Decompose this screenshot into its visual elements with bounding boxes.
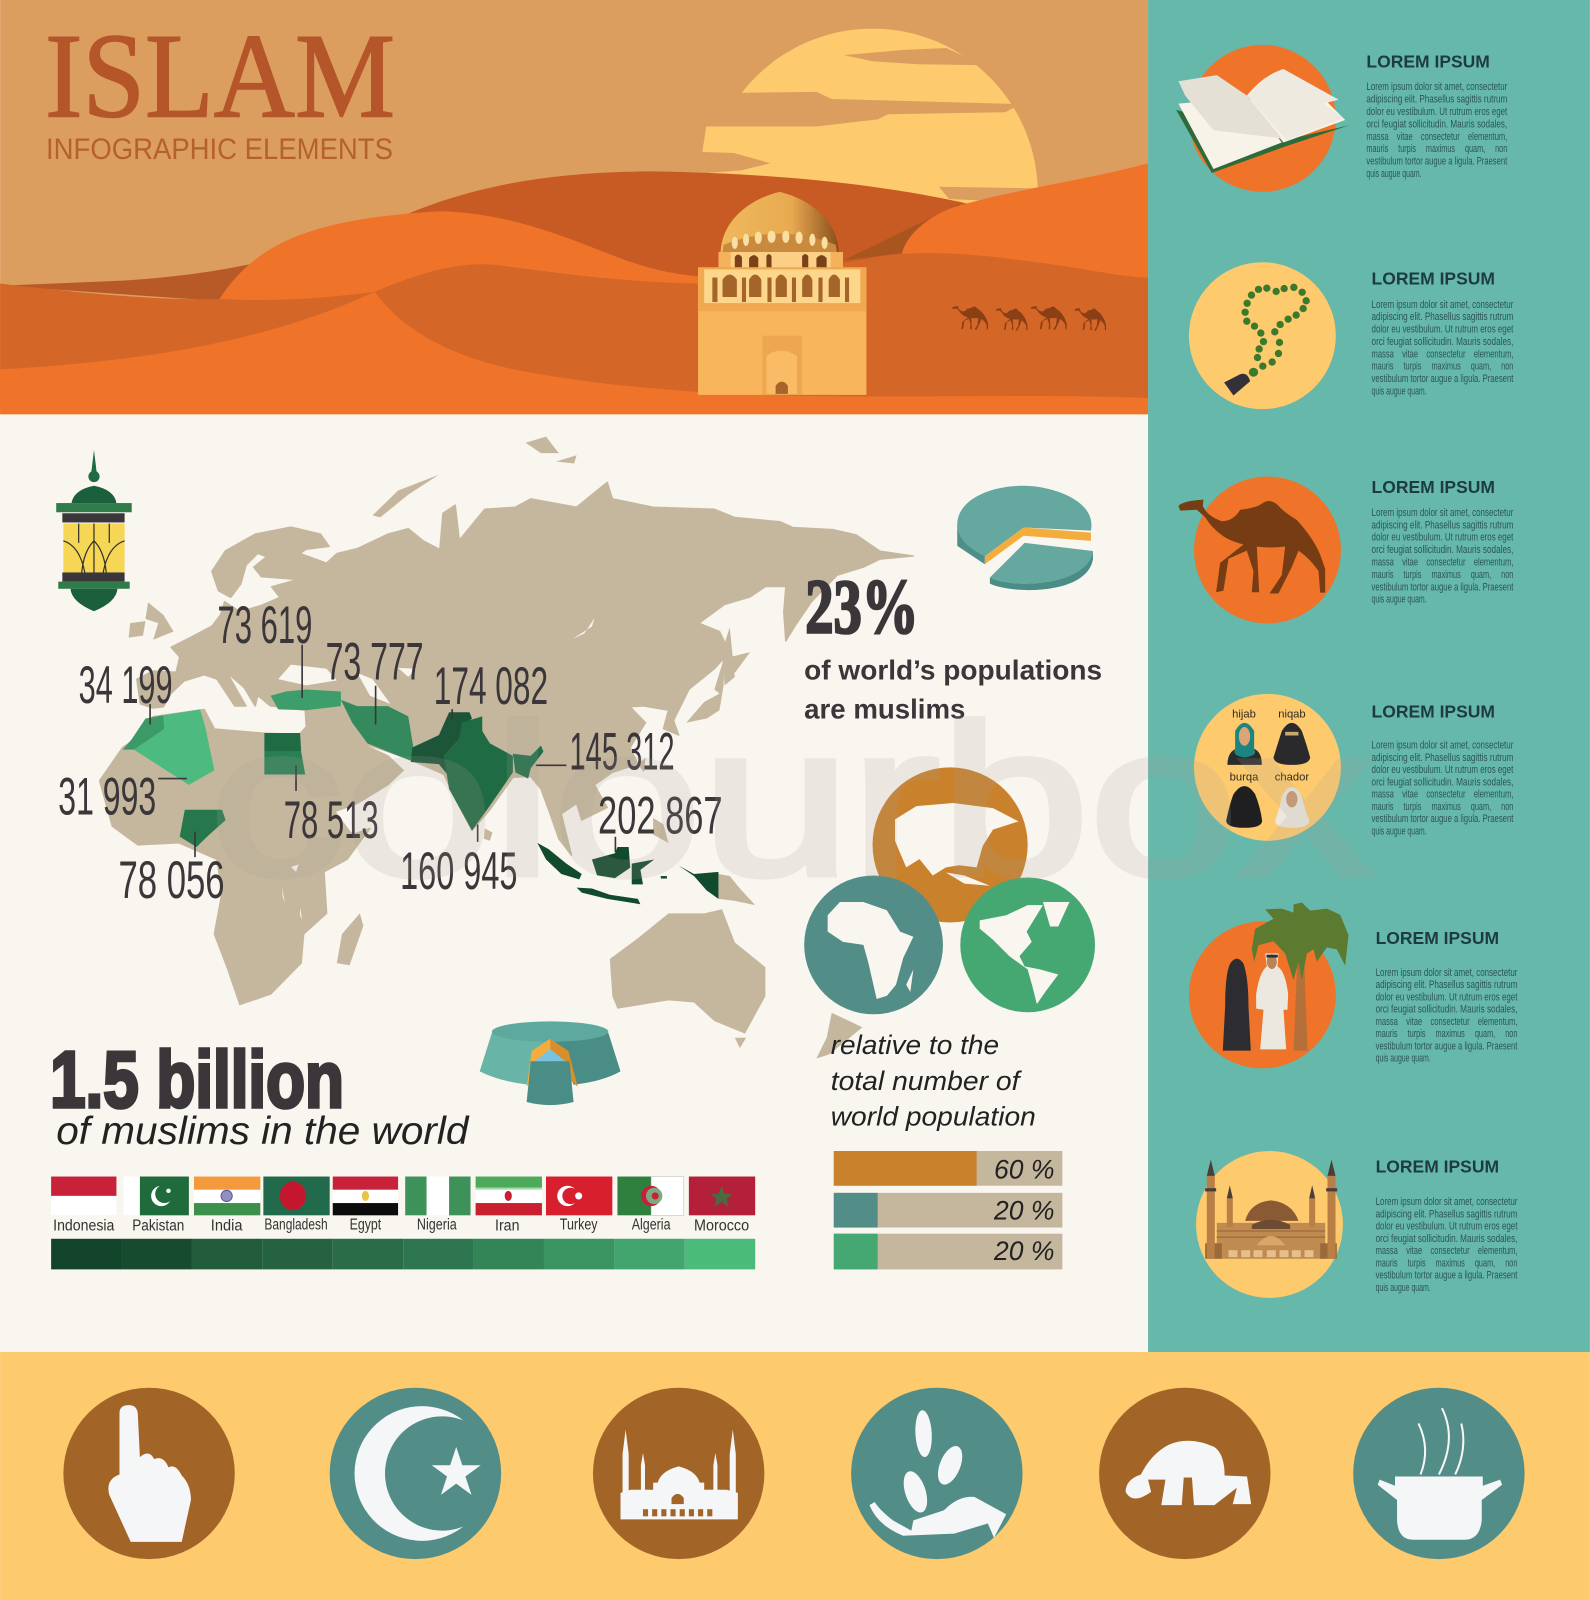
panel: bottom band	[0, 1352, 1590, 1600]
body text: mauris turpis maximus quam, non	[1372, 569, 1513, 581]
heading: LOREM IPSUM	[1372, 269, 1495, 289]
pie chart	[957, 486, 1093, 590]
icon: coins in hand	[851, 1388, 1023, 1559]
flag: Turkey	[546, 1177, 612, 1215]
subtitle: INFOGRAPHIC ELEMENTS	[46, 133, 393, 166]
icon: crescent and star	[330, 1388, 501, 1559]
body text: massa vitae consectetur elementum,	[1376, 1245, 1517, 1257]
icon: cooking pot with steam	[1353, 1388, 1525, 1559]
body text: mauris turpis maximus quam, non	[1376, 1257, 1517, 1269]
icon: four veil types	[1226, 723, 1310, 828]
country labels: Turkey	[560, 1217, 598, 1234]
country labels: Iran	[495, 1218, 519, 1235]
bar chart: continents: 20 %	[993, 1195, 1054, 1225]
flag: Egypt	[333, 1177, 398, 1215]
icon: lantern	[56, 450, 132, 611]
heading: LOREM IPSUM	[1372, 701, 1495, 721]
sun with clouds	[674, 29, 1061, 359]
text: relative to population	[831, 1030, 1036, 1132]
lakes	[278, 618, 594, 920]
body text	[1376, 1196, 1518, 1294]
map numbers and leader lines: 31 993	[58, 767, 156, 826]
icon: prostrating figure	[1099, 1388, 1271, 1559]
body text: quis augue quam.	[1372, 594, 1427, 606]
icon: open book	[1176, 69, 1349, 173]
icon: mosque silhouette	[593, 1388, 764, 1559]
bar chart: continents	[834, 1151, 1062, 1269]
icon: camel	[1178, 500, 1325, 593]
flag: Bangladesh	[263, 1177, 330, 1215]
map numbers and leader lines: 160 945	[400, 842, 517, 901]
icon: tasbih beads	[1224, 284, 1310, 396]
body text: adipiscing elit. Phasellus sagittis rutrum	[1366, 94, 1507, 106]
body text: dolor eu vestibulum. Ut rutrum eros eget	[1376, 1221, 1518, 1233]
text: relative to population: relative to the	[831, 1030, 999, 1060]
body text: orci feugiat sollicitudin. Mauris sodales,	[1376, 1233, 1517, 1245]
heading: LOREM IPSUM	[1376, 928, 1499, 948]
body text: adipiscing elit. Phasellus sagittis rutrum	[1376, 1208, 1517, 1220]
body text: mauris turpis maximus quam, non	[1366, 143, 1507, 155]
label: veil names: niqab	[1278, 708, 1306, 720]
islands	[129, 437, 862, 1058]
text: relative to population: total number of	[831, 1066, 1022, 1096]
watermark: colourbox	[209, 681, 1373, 920]
landmass: Eurasia	[137, 482, 913, 855]
body text: Lorem ipsum dolor sit amet, consectetur	[1376, 967, 1518, 979]
body text: adipiscing elit. Phasellus sagittis rutrum	[1376, 979, 1517, 991]
text: population statement: of world’s populations	[804, 655, 1102, 686]
body text: quis augue quam.	[1372, 385, 1427, 397]
heading: LOREM IPSUM	[1376, 1156, 1499, 1176]
body text: quis augue quam.	[1376, 1282, 1431, 1294]
world map	[100, 437, 913, 1058]
country labels: Morocco	[694, 1218, 749, 1235]
body text	[1372, 740, 1514, 837]
bar chart: continents: 60 %	[994, 1155, 1054, 1185]
map numbers and leader lines: 174 082	[434, 657, 548, 716]
body text: dolor eu vestibulum. Ut rutrum eros eget	[1372, 764, 1514, 776]
body text: orci feugiat sollicitudin. Mauris sodales,	[1372, 544, 1513, 556]
body text: massa vitae consectetur elementum,	[1372, 789, 1513, 801]
body text: mauris turpis maximus quam, non	[1376, 1028, 1517, 1040]
sidebar item 1: book	[1176, 45, 1508, 192]
sidebar item 3: camel	[1178, 477, 1514, 623]
body text: dolor eu vestibulum. Ut rutrum eros eget	[1372, 324, 1514, 336]
continent circle: Africa	[804, 876, 943, 1014]
flags row	[51, 1177, 755, 1215]
flag: Iran	[476, 1177, 542, 1215]
body text: quis augue quam.	[1376, 1053, 1431, 1065]
label: veil names: hijab	[1232, 708, 1256, 720]
icon: grand mosque	[1205, 1160, 1337, 1259]
country labels: Egypt	[350, 1217, 382, 1234]
panel: teal sidebar	[1148, 0, 1590, 1352]
body text: adipiscing elit. Phasellus sagittis rutrum	[1372, 519, 1513, 531]
country labels: Pakistan	[132, 1218, 184, 1235]
sidebar item 6: grand mosque	[1196, 1151, 1518, 1298]
green scale bar	[51, 1239, 755, 1269]
flag: Algeria	[617, 1177, 684, 1215]
body text: orci feugiat sollicitudin. Mauris sodales,	[1372, 776, 1513, 788]
body text: vestibulum tortor augue a ligula. Praesent	[1372, 813, 1514, 825]
body text: vestibulum tortor augue a ligula. Praesent	[1372, 373, 1514, 385]
sidebar item 5: couple and palm	[1189, 902, 1518, 1068]
mosque tower	[698, 192, 866, 395]
country labels: Indonesia	[53, 1218, 115, 1235]
body text: mauris turpis maximus quam, non	[1372, 361, 1513, 373]
body text: massa vitae consectetur elementum,	[1376, 1016, 1517, 1028]
body text: adipiscing elit. Phasellus sagittis rutrum	[1372, 752, 1513, 764]
bar chart: continents: 20 %	[993, 1236, 1054, 1266]
country labels	[53, 1217, 749, 1235]
stat: 1.5 billion: 1.5 billion	[50, 1035, 344, 1124]
body text: adipiscing elit. Phasellus sagittis rutrum	[1372, 311, 1513, 323]
continent circle: Asia	[873, 767, 1028, 922]
map numbers and leader lines: 202 867	[598, 787, 723, 846]
body text: vestibulum tortor augue a ligula. Praesent	[1366, 156, 1508, 168]
text: population statement: are muslims	[804, 693, 965, 724]
map numbers and leader lines: 145 312	[569, 722, 675, 781]
label: veil names: chador	[1275, 772, 1309, 784]
country labels: India	[211, 1218, 243, 1235]
map numbers and leader lines	[58, 596, 723, 910]
stat: 23%: 23%	[805, 564, 918, 650]
sidebar item 2: prayer beads	[1189, 262, 1514, 409]
body text: dolor eu vestibulum. Ut rutrum eros eget	[1376, 991, 1518, 1003]
icon: shahada pointing finger	[63, 1388, 235, 1559]
country labels: Algeria	[632, 1217, 671, 1234]
map numbers and leader lines: 78 056	[118, 851, 225, 910]
map numbers and leader lines: 78 513	[284, 791, 379, 850]
body text: dolor eu vestibulum. Ut rutrum eros eget	[1366, 106, 1508, 118]
body text: Lorem ipsum dolor sit amet, consectetur	[1372, 299, 1514, 311]
body text: quis augue quam.	[1366, 168, 1422, 180]
country labels: Bangladesh	[264, 1217, 328, 1234]
body text	[1376, 967, 1518, 1065]
flag: Morocco	[689, 1177, 755, 1215]
map numbers and leader lines: 73 777	[326, 633, 424, 692]
flag: Indonesia	[51, 1177, 116, 1215]
icon: couple and palm	[1223, 902, 1349, 1051]
text: population statement	[804, 655, 1102, 724]
body text: massa vitae consectetur elementum,	[1372, 557, 1513, 569]
flag: Nigeria	[405, 1177, 471, 1215]
body text: massa vitae consectetur elementum,	[1366, 131, 1507, 143]
body text: orci feugiat sollicitudin. Mauris sodales,	[1366, 118, 1507, 130]
icon: hat shrine	[480, 1021, 621, 1105]
label: veil names	[1230, 708, 1309, 784]
body text: quis augue quam.	[1372, 825, 1427, 837]
body text: massa vitae consectetur elementum,	[1372, 348, 1513, 360]
camel caravan	[952, 306, 1106, 330]
body text: Lorem ipsum dolor sit amet, consectetur	[1372, 740, 1514, 752]
body text: orci feugiat sollicitudin. Mauris sodales,	[1376, 1004, 1517, 1016]
body text: Lorem ipsum dolor sit amet, consectetur	[1376, 1196, 1518, 1208]
flag: India	[194, 1177, 260, 1215]
continent circle: Americas	[960, 878, 1095, 1012]
highlighted countries	[123, 689, 718, 904]
body text: Lorem ipsum dolor sit amet, consectetur	[1372, 507, 1514, 519]
body text: orci feugiat sollicitudin. Mauris sodales,	[1372, 336, 1513, 348]
text: relative to population: world population	[831, 1102, 1036, 1132]
body text: mauris turpis maximus quam, non	[1372, 801, 1513, 813]
map numbers and leader lines: 73 619	[217, 596, 312, 655]
panel: desert header	[0, 0, 1148, 414]
sidebar item 4: veils	[1194, 694, 1514, 841]
landmass: Africa	[100, 709, 370, 1005]
dunes	[0, 163, 1148, 414]
body text: dolor eu vestibulum. Ut rutrum eros eget	[1372, 532, 1514, 544]
body text: vestibulum tortor augue a ligula. Praesent	[1376, 1040, 1518, 1052]
body text	[1372, 299, 1514, 397]
body text: Lorem ipsum dolor sit amet, consectetur	[1366, 81, 1507, 93]
body text: vestibulum tortor augue a ligula. Praesent	[1376, 1270, 1518, 1282]
body text: vestibulum tortor augue a ligula. Praesent	[1372, 581, 1514, 593]
body text	[1372, 507, 1514, 606]
heading: LOREM IPSUM	[1372, 477, 1495, 497]
flag: Pakistan	[124, 1177, 189, 1215]
label: veil names: burqa	[1230, 772, 1259, 784]
map numbers and leader lines: 34 199	[79, 656, 173, 715]
title: ISLAM	[45, 10, 395, 143]
body text	[1366, 81, 1508, 180]
heading: LOREM IPSUM	[1366, 51, 1490, 71]
text: of muslims in the world: of muslims in the world	[56, 1110, 470, 1153]
country labels: Nigeria	[417, 1217, 457, 1234]
